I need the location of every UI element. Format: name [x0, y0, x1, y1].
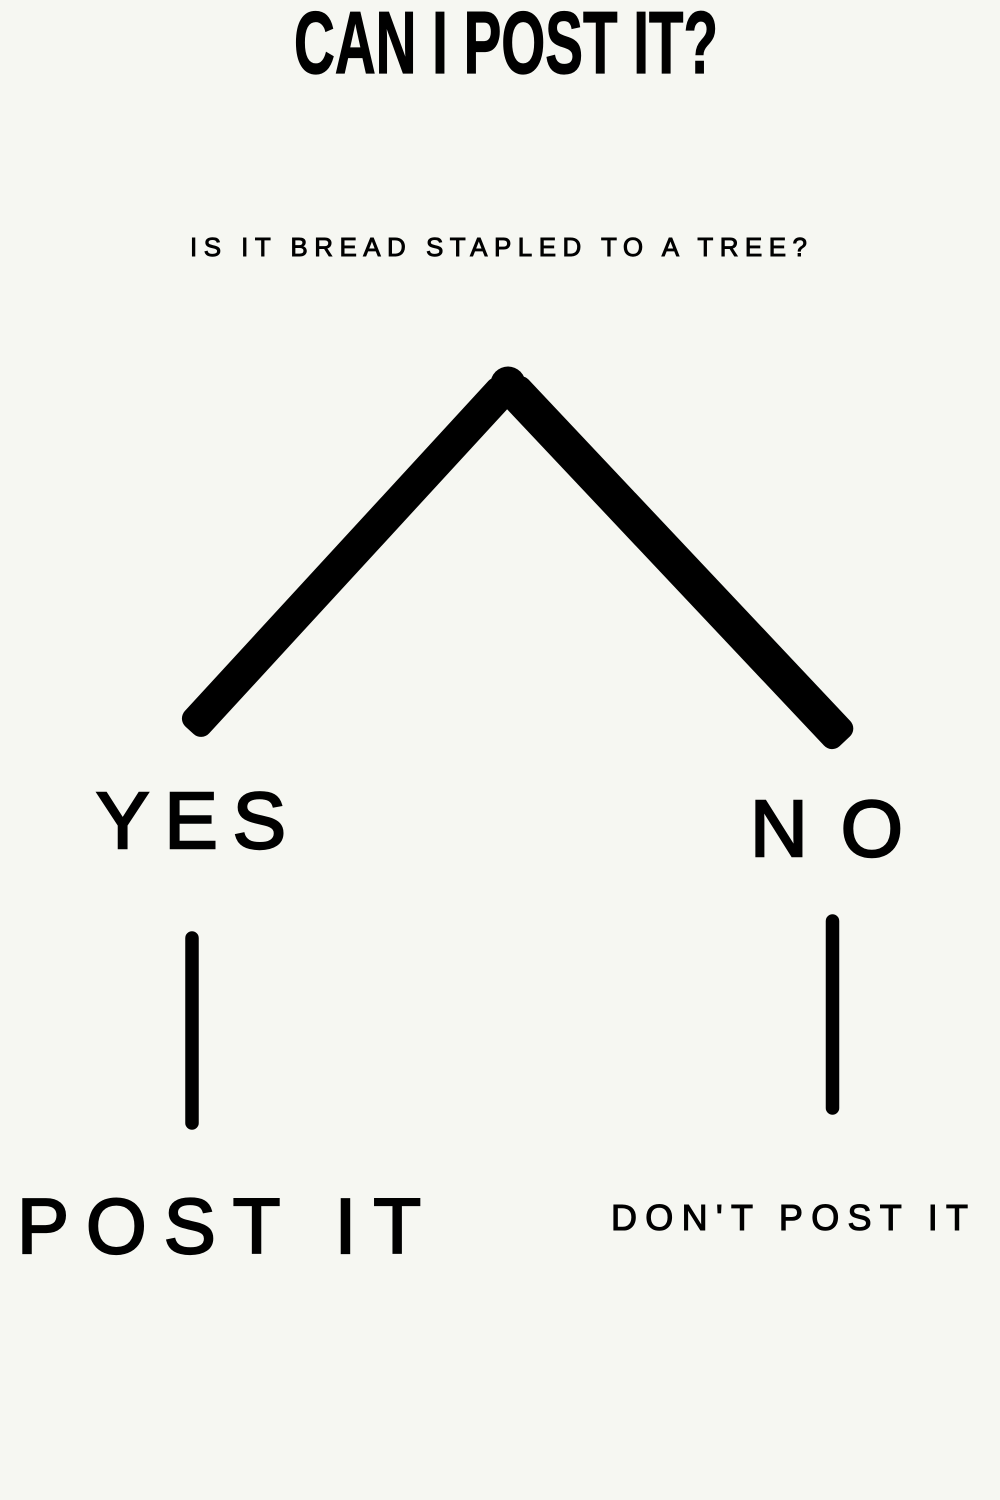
- label: yes: YES: [96, 776, 286, 865]
- branch apex: [490, 366, 526, 402]
- connector: yes to post it: [185, 938, 199, 1123]
- label: no: NO: [750, 784, 903, 873]
- arrow: branch to yes: [177, 373, 520, 741]
- arrow: branch to no: [495, 372, 858, 754]
- decision branches: [177, 366, 858, 754]
- connector: no to don't post it: [826, 921, 839, 1108]
- outcome: post it: POST IT: [17, 1182, 421, 1270]
- outcome: don't post it: DON'T POST IT: [611, 1197, 968, 1238]
- question: IS IT BREAD STAPLED TO A TREE?: [190, 232, 807, 262]
